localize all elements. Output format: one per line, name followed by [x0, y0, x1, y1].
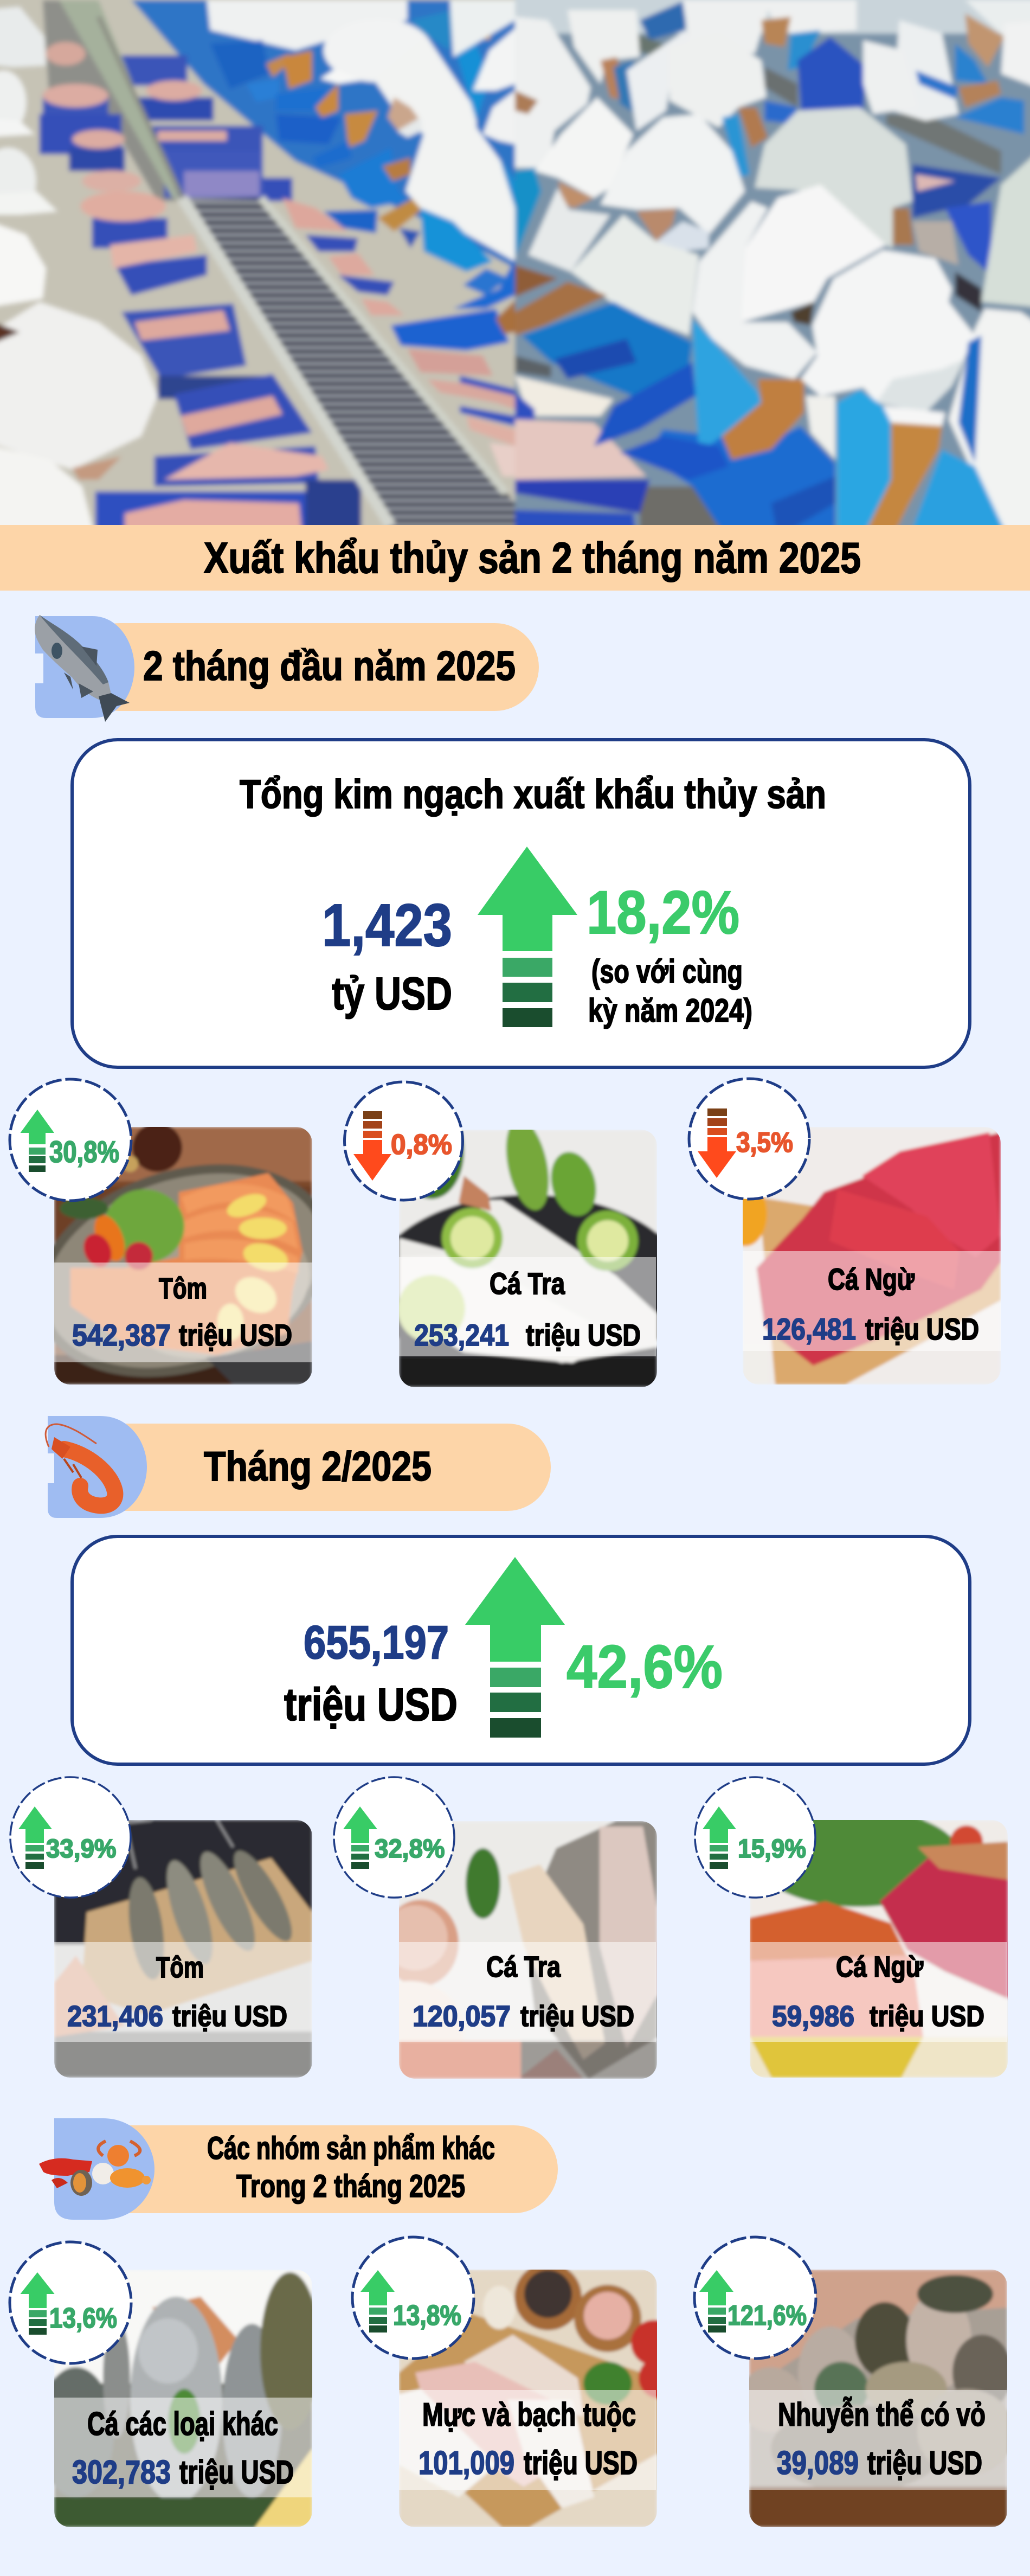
- value 1,423: 1,423: [322, 892, 452, 959]
- heading line 2: Trong 2 tháng 2025: [236, 2169, 465, 2204]
- unit tỷ USD: tỷ USD: [332, 968, 452, 1019]
- card unit: triệu USD: [870, 2000, 984, 2033]
- badge: +13,6%: [10, 2242, 131, 2363]
- badge: -3,5%: [689, 1079, 809, 1199]
- badge: +121,6%: [694, 2237, 816, 2359]
- icon: salmon fish: [35, 615, 130, 722]
- card label: Cá Tra: [486, 1951, 561, 1983]
- heading text: 2 tháng đầu năm 2025: [143, 643, 516, 689]
- card value: 101,009: [419, 2445, 514, 2481]
- badge: -0,8%: 0,8%: [391, 1129, 452, 1161]
- card: Cá Tra, tháng 2: [334, 1777, 657, 2079]
- icon: up arrow: [478, 847, 577, 1027]
- value 655,197: 655,197: [304, 1617, 449, 1669]
- note line 1: (so với cùng: [591, 953, 743, 990]
- card: Cá Ngừ, tháng 2: [695, 1777, 1008, 2078]
- card value: 302,783: [72, 2454, 171, 2490]
- badge: +121,6%: 121,6%: [728, 2300, 807, 2331]
- badge: +15,9%: 15,9%: [738, 1835, 806, 1863]
- card: Nhuyễn thể có vỏ: [694, 2237, 1015, 2527]
- note line 2: kỳ năm 2024): [588, 992, 752, 1029]
- badge: +32,8%: [334, 1777, 454, 1898]
- heading text: Tháng 2/2025: [204, 1444, 432, 1490]
- card value: 59,986: [772, 2000, 854, 2033]
- card value: 126,481: [762, 1312, 856, 1346]
- card label: Mực và bạch tuộc: [422, 2396, 636, 2433]
- section header: 2 tháng đầu năm 2025: [35, 615, 539, 722]
- card unit: triệu USD: [865, 1312, 979, 1346]
- card label: Cá các loại khác: [87, 2406, 278, 2442]
- section header: Tháng 2/2025: [46, 1416, 551, 1518]
- change 42,6%: 42,6%: [566, 1633, 723, 1701]
- section header: other product groups: [39, 2118, 558, 2220]
- badge: +30,8%: 30,8%: [49, 1135, 119, 1169]
- card: Cá Ngừ, 2 tháng: [689, 1079, 1001, 1385]
- change 18,2%: 18,2%: [587, 879, 739, 946]
- heading line 1: Các nhóm sản phẩm khác: [207, 2131, 495, 2166]
- card unit: triệu USD: [524, 2445, 638, 2481]
- icon: mixed seafood: [39, 2141, 151, 2196]
- card: Cá các loại khác: [10, 2242, 320, 2527]
- card unit: triệu USD: [179, 2454, 294, 2490]
- main title: Xuất khẩu thủy sản 2 tháng năm 2025: [204, 534, 861, 582]
- card label: Cá Ngừ: [828, 1262, 915, 1296]
- card label: Cá Ngừ: [836, 1951, 924, 1983]
- badge: +13,8%: 13,8%: [393, 2300, 461, 2331]
- panel: February export value: [72, 1536, 970, 1764]
- card value: 253,241: [414, 1318, 509, 1352]
- card value: 120,057: [413, 2000, 511, 2033]
- card value: 542,387: [72, 1318, 171, 1352]
- card: Tôm, 2 tháng: [9, 1078, 312, 1385]
- card unit: triệu USD: [520, 2000, 634, 2033]
- title banner: [0, 525, 1030, 591]
- card unit: triệu USD: [179, 1318, 292, 1352]
- panel: total export value: [72, 740, 970, 1067]
- badge: +30,8%: [10, 1079, 131, 1201]
- panel title: Tổng kim ngạch xuất khẩu thủy sản: [240, 772, 826, 817]
- card value: 231,406: [67, 2000, 163, 2033]
- badge: +33,9%: 33,9%: [46, 1835, 116, 1863]
- badge: -0,8%: [345, 1082, 463, 1200]
- badge: +33,9%: [10, 1777, 131, 1898]
- badge: +13,6%: 13,6%: [49, 2303, 117, 2334]
- card unit: triệu USD: [526, 1318, 641, 1352]
- badge: +32,8%: 32,8%: [375, 1835, 445, 1863]
- card: Tôm, tháng 2: [10, 1777, 312, 2078]
- badge: -3,5%: 3,5%: [736, 1127, 793, 1158]
- card: Mực và bạch tuộc: [352, 2237, 680, 2527]
- badge: +15,9%: [695, 1777, 815, 1898]
- card label: Tôm: [159, 1272, 207, 1305]
- unit triệu USD: triệu USD: [284, 1679, 458, 1730]
- card label: Tôm: [156, 1951, 204, 1984]
- card unit: triệu USD: [867, 2445, 982, 2481]
- icon: shrimp: [46, 1424, 115, 1505]
- card label: Cá Tra: [490, 1266, 565, 1300]
- icon: up arrow: [465, 1557, 565, 1738]
- badge: +13,8%: [352, 2237, 474, 2359]
- hero photo: seafood processing line: [0, 0, 1030, 553]
- card unit: triệu USD: [172, 2000, 287, 2033]
- card value: 39,089: [777, 2445, 859, 2481]
- card: Cá Tra, 2 tháng: [345, 1082, 686, 1387]
